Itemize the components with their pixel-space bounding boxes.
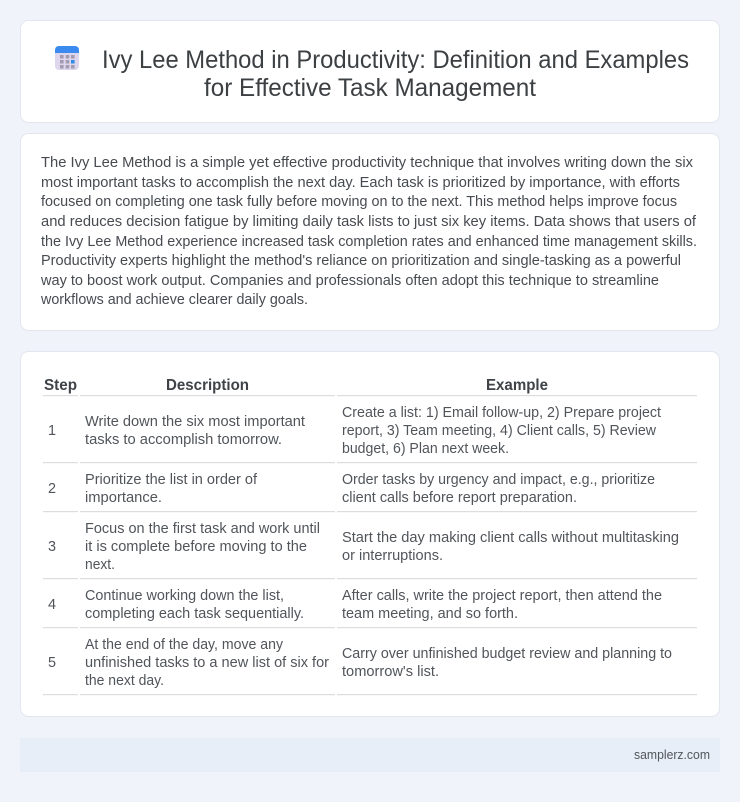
table row 3: Start the day making client calls without multitasking	[342, 530, 679, 546]
table row 1: Write down the six most important	[85, 414, 305, 430]
table row 5: Carry over unfinished budget review and planning to	[342, 646, 672, 662]
table row 2: 2	[48, 481, 56, 497]
table row 1: budget, 6) Plan next week.	[342, 441, 509, 457]
panel: steps table	[20, 352, 720, 716]
panel: summary paragraph	[20, 134, 720, 330]
table row 5: the next day.	[85, 673, 164, 689]
title: Ivy Lee Method in Productivity: Definition and Examples	[102, 46, 689, 74]
title: for Effective Task Management	[204, 74, 536, 102]
text block: summary: and reduces decision fatigue by limiting daily task lists to just six key items. Data shows that users of	[41, 214, 697, 230]
icon: calendar	[55, 46, 79, 70]
table header: Step	[44, 377, 77, 394]
table row 5: tomorrow's list.	[342, 664, 439, 680]
table row 1: 1	[48, 423, 56, 439]
table row 2: Order tasks by urgency and impact, e.g., prioritize	[342, 472, 655, 488]
text block: summary: workflows and achieve clearer daily goals.	[40, 292, 308, 308]
table header: Description	[166, 377, 249, 394]
table row 3: next.	[85, 557, 115, 573]
table row 1: Create a list: 1) Email follow-up, 2) Prepare project	[342, 405, 661, 421]
text block: summary: most important tasks to accomplish the next day. Each task is prioritized by importance, with efforts	[41, 175, 680, 191]
table row 2: Prioritize the list in order of	[85, 472, 258, 488]
text block: summary: The Ivy Lee Method is a simple yet effective productivity technique that involves writing down the six	[41, 155, 694, 171]
table row 3: Focus on the first task and work until	[85, 521, 320, 537]
footer text: samplerz.com	[634, 748, 710, 762]
table row 3: it is complete before moving to the	[85, 539, 307, 555]
text block: summary	[40, 155, 697, 308]
table row 5	[48, 637, 672, 689]
table row 4: completing each task sequentially.	[85, 606, 304, 622]
table row 2	[48, 472, 655, 506]
table row 2: importance.	[85, 490, 162, 506]
table row 1: tasks to accomplish tomorrow.	[85, 432, 282, 448]
table row 4: Continue working down the list,	[85, 588, 284, 604]
table row 5: 5	[48, 655, 56, 671]
table row 5: unfinished tasks to a new list of six for	[85, 655, 329, 671]
table row 4	[48, 588, 662, 622]
title	[102, 46, 689, 102]
text block: summary: way to boost work output. Companies and professionals often adopt this technique to streamline	[40, 273, 659, 289]
panel: title card	[20, 20, 720, 122]
table row 3: or interruptions.	[342, 548, 443, 564]
table row 2: client calls before report preparation.	[342, 490, 577, 506]
table row 5: At the end of the day, move any	[85, 637, 284, 653]
table header	[44, 377, 548, 394]
text block: summary: focused on completing one task fully before moving on to the next. This method helps improve focus	[41, 194, 677, 210]
table row 1: report, 3) Team meeting, 4) Client calls, 5) Review	[342, 423, 657, 439]
table row 4: team meeting, and so forth.	[342, 606, 518, 622]
table row 4: After calls, write the project report, then attend the	[342, 588, 662, 604]
table row 4: 4	[48, 597, 56, 613]
table row 1	[48, 405, 661, 457]
footer bar	[20, 738, 720, 772]
text block: summary: the Ivy Lee Method experience increased task completion rates and enhanced time management skills.	[41, 234, 697, 250]
table header: Example	[486, 377, 548, 394]
text block: summary: Productivity experts highlight the method's reliance on prioritization and single-tasking as a powerful	[41, 253, 681, 269]
table row 3: 3	[48, 539, 56, 555]
table row 3	[48, 521, 679, 573]
